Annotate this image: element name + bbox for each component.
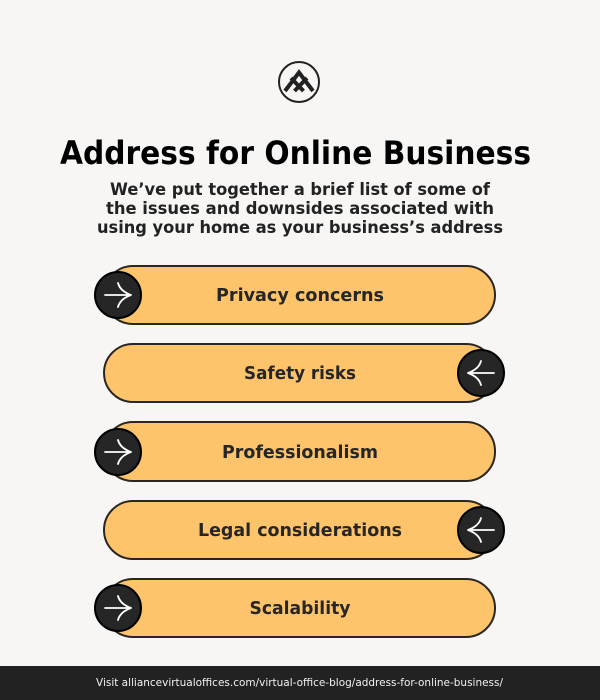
list item: Professionalism	[95, 422, 495, 481]
list item: Scalability	[95, 579, 495, 637]
footer bar: Visit alliancevirtualoffices.com/virtual-office-blog/address-for-online-business/	[96, 676, 503, 689]
list item: Professionalism: Professionalism	[222, 442, 378, 463]
icon: left arrow	[458, 350, 504, 396]
list item: Privacy concerns: Privacy concerns	[216, 285, 384, 306]
subtitle text block: the issues and downsides associated with	[106, 199, 494, 219]
icon: right arrow	[95, 429, 141, 475]
list item: Safety risks: Safety risks	[244, 363, 356, 384]
footer bar	[0, 666, 600, 700]
list item: Safety risks	[104, 344, 504, 402]
title: Address for Online Business	[60, 134, 531, 172]
icon: right arrow	[95, 272, 141, 318]
subtitle text block: We’ve put together a brief list of some of	[110, 180, 491, 200]
list item: Privacy concerns	[95, 266, 495, 324]
subtitle text block	[97, 180, 503, 238]
icon: right arrow	[95, 585, 141, 631]
icon: left arrow	[458, 507, 504, 553]
subtitle text block: using your home as your business’s address	[97, 218, 503, 238]
icon: logo	[279, 62, 319, 102]
list item: Legal considerations: Legal considerations	[198, 520, 402, 541]
list item: Scalability: Scalability	[250, 598, 351, 619]
list item: Legal considerations	[104, 501, 504, 559]
